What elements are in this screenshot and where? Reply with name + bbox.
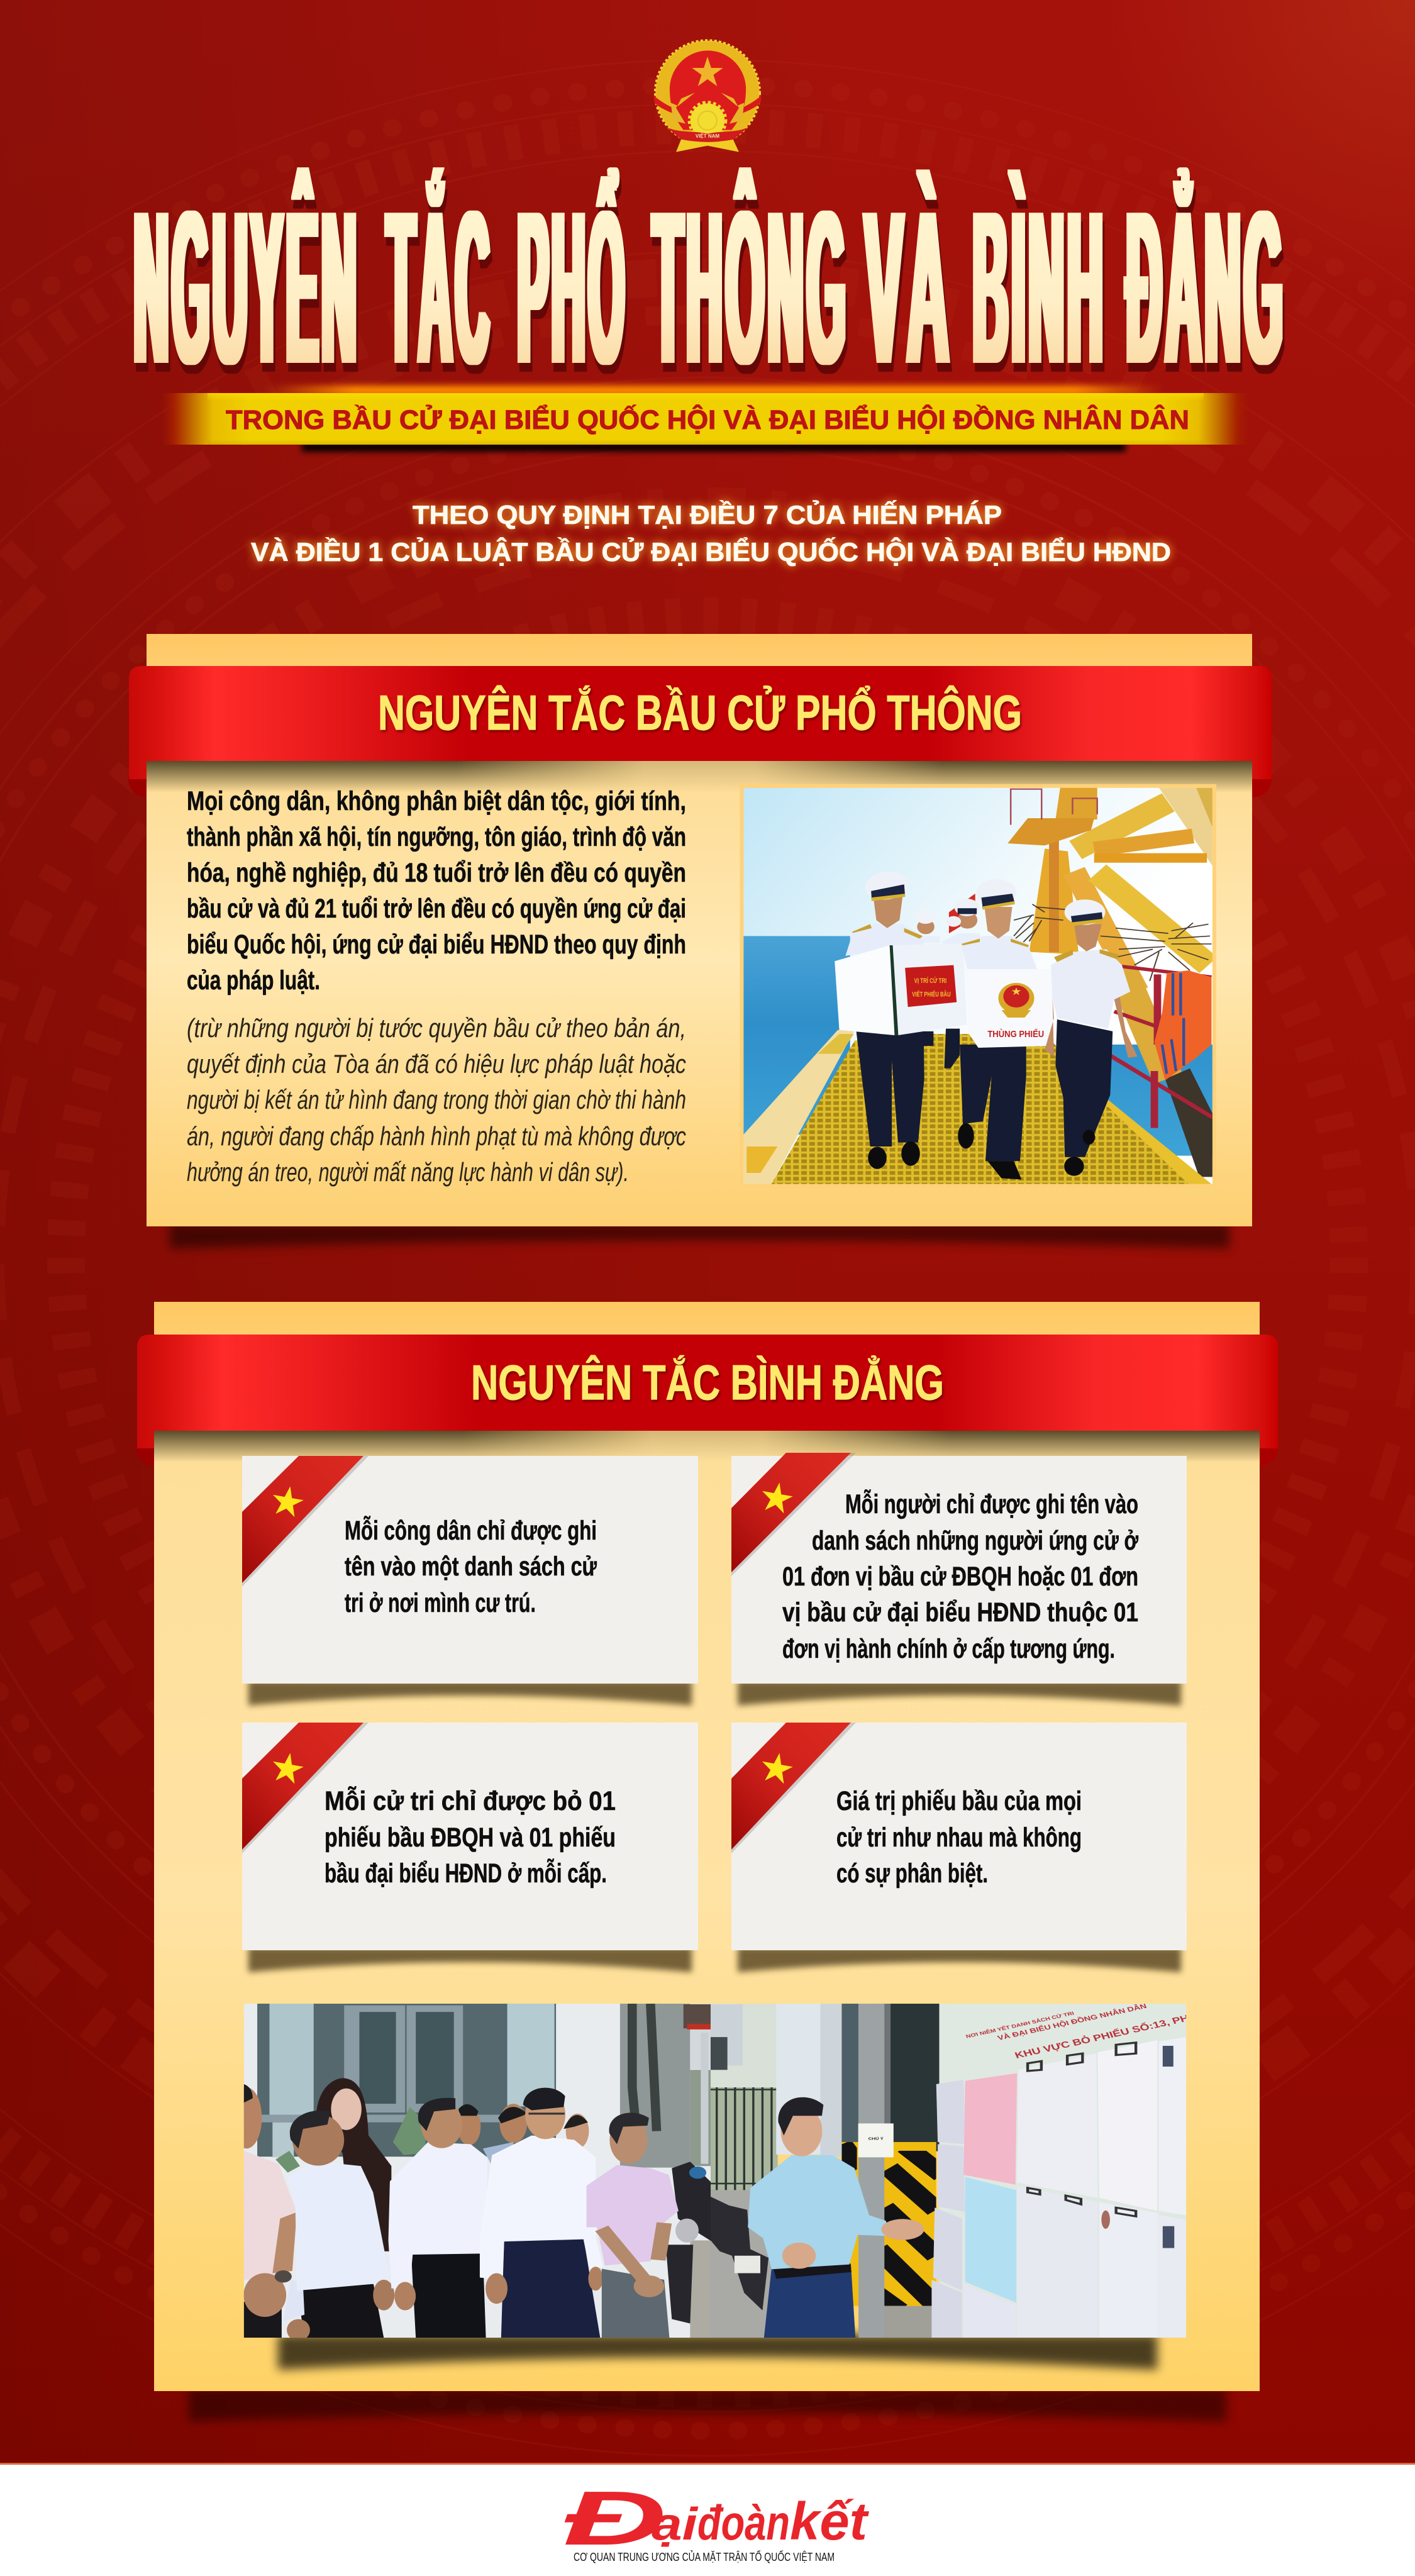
card: one voter list xyxy=(242,1456,698,1706)
man five xyxy=(587,2112,679,2338)
background officers xyxy=(916,894,980,1069)
logo: Dai doan ket: đoàn xyxy=(697,2495,790,2550)
icon: national emblem of Vietnam: VIỆT NAM xyxy=(696,133,719,139)
legal basis text xyxy=(251,499,1171,567)
card: one constituency xyxy=(731,1453,1187,1706)
noticeboard: KHU VỰC BỎ PHIẾU SỐ:13, PHƯỜNG: NA xyxy=(1013,1999,1251,2060)
noticeboard: VÀ ĐẠI BIỂU HỘI ĐỒNG NHÂN DÂN xyxy=(996,2002,1148,2042)
officer left xyxy=(845,869,926,1169)
card: equal vote value: Giá trị phiếu bầu của mọi xyxy=(836,1786,1082,1816)
right half of photo: man speaking at notice board xyxy=(711,1999,1251,2338)
card: one ballot per level xyxy=(242,1723,698,1972)
box one xyxy=(835,943,967,1035)
card: one voter list: tri ở nơi mình cư trú. xyxy=(345,1588,536,1618)
text block: exceptions in italics: (trừ những người bị tước quyền bầu cử theo bản án, xyxy=(187,1013,686,1043)
box two: THÙNG PHIẾU xyxy=(987,1029,1044,1040)
card: one constituency: đơn vị hành chính ở cấp tương ứng. xyxy=(782,1634,1115,1664)
left half of photo: group of men xyxy=(231,2004,718,2341)
card: equal vote value: cử tri như nhau mà không xyxy=(836,1823,1082,1853)
text block: universal suffrage rule: bầu cử và đủ 21 tuổi trở lên đều có quyền ứng cử đại xyxy=(187,894,686,924)
card: one voter list: tên vào một danh sách cử xyxy=(345,1552,597,1582)
card: equal vote value xyxy=(731,1723,1187,1972)
subtitle gold banner: TRONG BẦU CỬ ĐẠI BIỂU QUỐC HỘI VÀ ĐẠI BIỂU HỘI ĐỒNG NHÂN DÂN xyxy=(226,404,1189,435)
card: one constituency: 01 đơn vị bầu cử ĐBQH hoặc 01 đơn xyxy=(782,1562,1138,1592)
card: one constituency: vị bầu cử đại biểu HĐND thuộc 01 xyxy=(782,1597,1138,1628)
text block: exceptions in italics: người bị kết án tử hình đang trong thời gian chờ thi hành xyxy=(187,1085,686,1114)
text block: universal suffrage rule xyxy=(187,786,686,996)
ribbon heading: equality: NGUYÊN TẮC BÌNH ĐẲNG xyxy=(471,1355,944,1410)
logo: Dai doan ket xyxy=(563,2475,869,2561)
ribbon heading: equality xyxy=(136,1335,1278,1466)
text block: exceptions in italics: hưởng án treo, người mất năng lực hành vi dân sự). xyxy=(187,1157,629,1187)
title: TẮC xyxy=(387,165,492,409)
legal basis text: THEO QUY ĐỊNH TẠI ĐIỀU 7 CỦA HIẾN PHÁP xyxy=(413,499,1002,530)
icon: national emblem of Vietnam xyxy=(653,40,762,152)
logo: Dai doan ket: kết xyxy=(790,2492,869,2551)
man two xyxy=(283,2111,394,2341)
box one: VIẾT PHIẾU BẦU xyxy=(912,989,951,998)
text block: exceptions in italics xyxy=(187,1013,686,1187)
logo: Dai doan ket: Đ xyxy=(563,2475,667,2561)
photo: delegation inspecting voter list xyxy=(231,1999,1251,2370)
text block: exceptions in italics: án, người đang chấp hành hình phạt tù mà không được xyxy=(187,1121,686,1151)
box one: VỊ TRÍ CỬ TRI xyxy=(914,976,946,985)
text block: universal suffrage rule: thành phần xã hội, tín ngưỡng, tôn giáo, trình độ văn xyxy=(187,822,686,852)
card: one constituency: Mỗi người chỉ được ghi tên vào xyxy=(845,1489,1138,1519)
panel: universal suffrage xyxy=(128,634,1272,1248)
card: one voter list: Mỗi công dân chỉ được ghi xyxy=(345,1515,597,1546)
title: NGUYÊN xyxy=(134,165,360,409)
life jacket xyxy=(1155,970,1211,1080)
noticeboard xyxy=(931,1999,1251,2338)
text block: universal suffrage rule: của pháp luật. xyxy=(187,965,320,996)
box two xyxy=(967,969,1052,1048)
text block: universal suffrage rule: Mọi công dân, không phân biệt dân tộc, giới tính, xyxy=(187,786,686,816)
officer centre xyxy=(958,879,1037,1180)
ribbon heading: universal suffrage: NGUYÊN TẮC BẦU CỬ PHỔ THÔNG xyxy=(378,685,1022,740)
man four xyxy=(480,2088,603,2338)
subtitle gold banner xyxy=(162,386,1250,452)
logo: Dai doan ket: ại xyxy=(652,2499,699,2550)
panel: equality principle xyxy=(136,1302,1278,2421)
footer with newspaper logo xyxy=(0,2463,1415,2576)
tower structure xyxy=(1007,788,1212,1177)
noticeboard: NƠI NIÊM YẾT DANH SÁCH CỬ TRI xyxy=(965,2010,1075,2039)
spikes xyxy=(1014,904,1211,981)
speaker xyxy=(748,2097,924,2338)
legal basis text: VÀ ĐIỀU 1 CỦA LUẬT BẦU CỬ ĐẠI BIỂU QUỐC HỘI VÀ ĐẠI BIỂU HĐND xyxy=(251,536,1171,567)
card: equal vote value: có sự phân biệt. xyxy=(836,1858,988,1889)
railing xyxy=(1109,967,1212,1128)
man three xyxy=(389,2098,487,2338)
right half of photo: man speaking at notice board: CHÚ Ý xyxy=(868,2136,884,2141)
tagline: CƠ QUAN TRUNG ƯƠNG CỦA MẶT TRẬN TỔ QUỐC VIỆT NAM xyxy=(574,2550,835,2563)
man far left xyxy=(231,2084,297,2338)
deck xyxy=(771,1034,1189,1184)
text block: universal suffrage rule: biểu Quốc hội, ứng cử đại biểu HĐND theo quy định xyxy=(187,930,686,960)
card: one constituency: danh sách những người ứng cử ở xyxy=(812,1526,1138,1556)
officer right xyxy=(1045,899,1138,1176)
card: one ballot per level: Mỗi cử tri chỉ được bỏ 01 xyxy=(325,1785,616,1816)
title: VÀ xyxy=(865,165,953,409)
card: one ballot per level: phiếu bầu ĐBQH và 01 phiếu xyxy=(325,1823,616,1853)
card: one ballot per level: bầu đại biểu HĐND ở mỗi cấp. xyxy=(325,1858,607,1889)
title: PHỔ xyxy=(518,165,628,409)
ribbon heading: universal suffrage xyxy=(128,666,1272,797)
photo: naval officers carrying ballot boxes xyxy=(740,784,1216,1188)
text block: exceptions in italics: quyết định của Tòa án đã có hiệu lực pháp luật hoặc xyxy=(187,1049,686,1079)
text block: universal suffrage rule: hóa, nghề nghiệp, đủ 18 tuổi trở lên đều có quyền xyxy=(187,858,686,888)
people behind xyxy=(316,2078,589,2251)
